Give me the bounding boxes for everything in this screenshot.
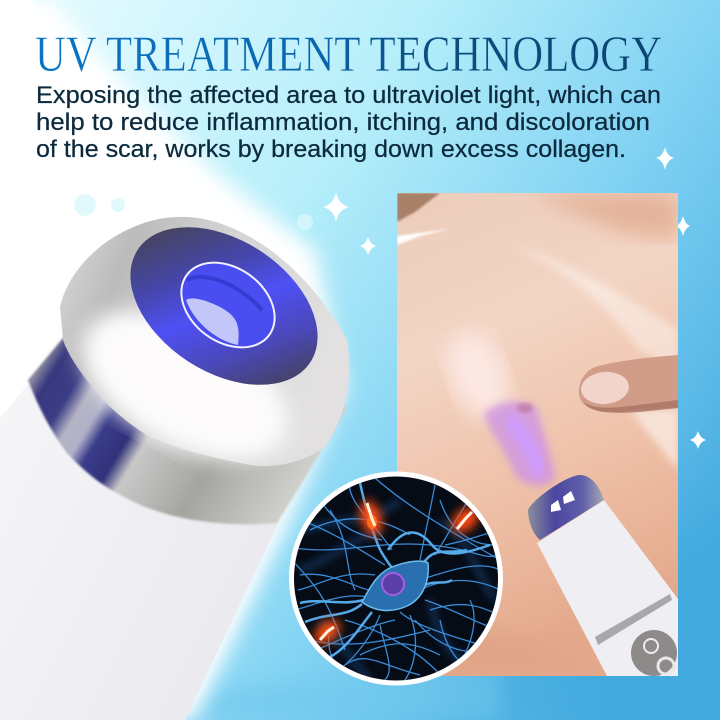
pen band — [595, 594, 672, 645]
photo: skin treatment — [397, 193, 678, 676]
lens — [164, 244, 292, 366]
sparkles — [323, 147, 706, 449]
skin shading — [530, 193, 678, 240]
description text: Exposing the affected area to ultraviolet light, which can — [36, 82, 661, 109]
nucleus — [382, 573, 404, 595]
dim background fibres — [300, 500, 495, 680]
finger — [579, 355, 678, 413]
pen body — [537, 500, 678, 676]
bevel and face — [60, 217, 349, 466]
description text: of the scar, works by breaking down excess collagen. — [36, 136, 626, 163]
white bevel highlight — [58, 279, 312, 491]
UV ring — [102, 195, 346, 417]
pen button — [631, 630, 677, 676]
description text — [36, 82, 661, 163]
nerve fibres — [292, 478, 500, 680]
cell body — [362, 561, 428, 611]
metal band — [28, 338, 347, 524]
description text: help to reduce inflammation, itching, and discoloration — [36, 109, 650, 136]
dark scar speck — [517, 403, 533, 413]
pen cap — [528, 475, 604, 540]
pale area above the scar — [442, 327, 516, 425]
purple scar glow — [484, 401, 555, 486]
neuron inset circle — [289, 472, 503, 686]
small UV pen — [528, 475, 678, 676]
bright dendrites — [300, 483, 490, 665]
skin — [397, 193, 678, 676]
orange sparks — [310, 498, 483, 649]
device body — [0, 382, 280, 720]
large UV device close-up — [0, 195, 349, 720]
hair and collar at top-left — [397, 193, 440, 222]
